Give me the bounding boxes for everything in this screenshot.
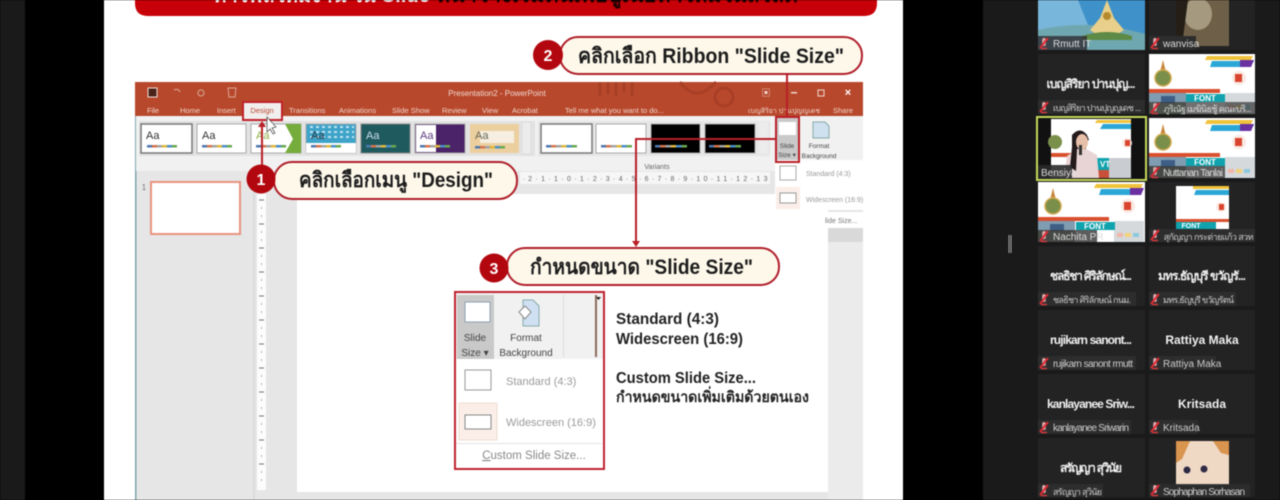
tile: เบญสิริยา: เบญสิริยา ปานปุญญเดช ... <box>1053 103 1141 114</box>
title banner <box>135 0 877 16</box>
tile: wanvisa <box>1149 0 1255 50</box>
Slide Size dropdown: Standard (4:3) <box>806 171 851 178</box>
tile: Rattiya Maka: Rattiya Maka <box>1165 333 1239 347</box>
tile: Rmutt IT <box>1038 0 1145 50</box>
tile: สุกัญญา: สุกัญญา กระต่ายแก้ว สวท <box>1164 232 1254 243</box>
person <box>1064 130 1099 178</box>
ribbon: Aa <box>420 130 434 142</box>
Slide Size dropdown: lide Size... <box>825 218 857 225</box>
tile: Kritsada: Kritsada <box>1178 397 1226 411</box>
tile: shared slide thumbnail 1 <box>1149 54 1255 115</box>
PowerPoint title bar: Review <box>442 106 467 115</box>
tile: Bensiya presenter: VT <box>1100 160 1110 169</box>
tile: มทร.ธัญบุรี: มทร.ธัญบุรี ขวัญรั... <box>1158 269 1246 284</box>
tile: Sophaphan Sorhasan with cat photo: Sophaphan Sorhasan <box>1163 487 1245 498</box>
text: custom size note: กำหนดขนาดเพิ่มเติมด้วยตนเอง <box>616 386 809 406</box>
tile: Nachita PR <box>1038 182 1145 243</box>
panel: PowerPoint window <box>135 82 863 500</box>
tile: เบญสิริยา: เบญสิริยา ปานปุญ... <box>1046 77 1136 92</box>
slide thumbnail <box>142 182 240 234</box>
PowerPoint title bar: Presentation2 - PowerPoint <box>448 89 546 98</box>
Slide Size highlight box <box>776 117 799 162</box>
PowerPoint title bar: ▣ <box>761 88 771 98</box>
PowerPoint title bar: Transitions <box>289 106 326 115</box>
ribbon: Variants <box>644 164 670 171</box>
tile: shared slide thumbnail 2: FONT <box>1194 158 1216 167</box>
tile: shared slide thumbnail 2 <box>1149 118 1255 179</box>
text: size options <box>616 311 743 348</box>
Design tab highlight <box>243 102 282 120</box>
tile: kanlayanee Sriwarin: kanlayanee Sriw... <box>1047 397 1135 411</box>
ribbon: Aa <box>311 130 325 142</box>
slide thumbnail: 1 <box>142 183 147 192</box>
icon: mouse cursor <box>267 117 276 134</box>
ribbon: Aa <box>202 130 216 142</box>
tile: เบญสิริยา <box>1038 54 1145 114</box>
callout: step 2 <box>533 37 862 74</box>
tile: rujikarn sanont <box>1038 310 1145 370</box>
PowerPoint title bar: Acrobat <box>512 106 539 115</box>
panel: enlarged Slide Size menu <box>455 292 604 469</box>
Slide Size dropdown <box>775 160 863 500</box>
tile: shared slide thumbnail 1: ภูริณัฐ เมฆินิธชู้ คณะบริ... <box>1164 104 1252 115</box>
tile: สรัญญา สุวินัย: สรัญญา สุวินัย <box>1053 487 1102 498</box>
panel: enlarged Slide Size menu: Format <box>510 333 542 344</box>
ribbon <box>136 116 863 171</box>
panel: enlarged Slide Size menu: Slide <box>464 333 487 344</box>
arrow: step 1 to Design tab <box>258 121 266 166</box>
PowerPoint title bar: Tell me what you want to do... <box>565 106 664 115</box>
tile: rujikarn sanont: rujikarn sanont... <box>1050 333 1132 347</box>
icon: format background <box>523 300 539 326</box>
horizontal ruler <box>520 172 770 184</box>
PowerPoint title bar: Slide Show <box>392 106 430 115</box>
tile: rujikarn sanont: rujikarn sanont rmutt <box>1053 359 1133 370</box>
tile: shared slide thumbnail 2: Nuttanan Tanlai <box>1163 168 1223 179</box>
PowerPoint title bar: Home <box>180 106 200 115</box>
Design tab highlight: Design <box>250 106 274 115</box>
tile: ชลธิชา: ชลธิชา ศิริลักษณ์... <box>1050 269 1132 283</box>
callout: step 2: 2 <box>544 48 553 65</box>
white slide canvas <box>297 194 828 492</box>
tile: kanlayanee Sriwarin: kanlayanee Sriwarin <box>1053 423 1129 434</box>
tile: shared slide thumbnail 1: FONT <box>1194 94 1216 103</box>
ribbon: Aa <box>366 130 380 142</box>
connector: step 2 to ribbon <box>786 74 788 117</box>
PowerPoint title bar: × <box>845 87 851 99</box>
ribbon: Format <box>809 143 829 150</box>
tile: ชลธิชา: ชลธิชา ศิริลักษณ์ กนม. <box>1053 294 1131 305</box>
tile: Nachita PR: Nachita PR <box>1053 232 1104 243</box>
tile: wanvisa: wanvisa <box>1162 39 1200 50</box>
text: custom size note: Custom Slide Size... <box>616 370 756 387</box>
tile: kanlayanee Sriwarin <box>1038 374 1145 434</box>
panel: enlarged Slide Size menu: Widescreen (16:9) <box>506 417 596 429</box>
tile: Rmutt IT: Rmutt IT <box>1053 39 1091 50</box>
vertical ruler <box>257 194 266 490</box>
panel: enlarged Slide Size menu: Custom Slide Size... <box>482 450 586 462</box>
tile: Nachita PR: FONT <box>1084 222 1106 231</box>
text: custom size note <box>616 370 809 406</box>
tile: Kritsada: Kritsada <box>1163 423 1200 434</box>
callout: step 3 <box>480 248 779 285</box>
ribbon: Aa <box>256 130 270 142</box>
tile: สรัญญา สุวินัย: สรัญญา สุวินัย <box>1060 461 1122 476</box>
PowerPoint title bar: Share <box>833 106 853 115</box>
PowerPoint title bar: File <box>147 106 159 115</box>
ribbon: Background <box>802 153 837 160</box>
ribbon: Slide <box>780 143 795 150</box>
panel: enlarged Slide Size menu: Background <box>499 348 553 359</box>
callout: step 2: คลิกเลือก Ribbon "Slide Size" <box>578 44 844 68</box>
icon: panel drag handle <box>1009 235 1011 253</box>
tile: ชลธิชา <box>1038 246 1145 306</box>
tile: สุกัญญา: FONT <box>1181 223 1201 230</box>
text: size options: Widescreen (16:9) <box>616 331 743 348</box>
horizontal ruler: ·2·1·1·0·1·2·3·4·5·6·7·8·9·10·11·12·13 <box>522 176 768 183</box>
tile: สุกัญญา <box>1149 182 1255 243</box>
PowerPoint title bar: เบญสิริยา ปานปุญญเดช <box>748 107 820 115</box>
ribbon: Aa <box>475 130 489 142</box>
PowerPoint title bar <box>135 82 863 116</box>
panel: presentation slide <box>104 0 903 500</box>
tile: Rattiya Maka: Rattiya Maka <box>1163 359 1222 370</box>
ribbon: Size ▾ <box>778 152 797 159</box>
tile: มทร.ธัญบุรี: มทร.ธัญบุรี ขวัญรัตน์ <box>1163 294 1234 306</box>
tile: Sophaphan Sorhasan with cat photo <box>1149 438 1255 498</box>
callout: step 3: กำหนดขนาด "Slide Size" <box>530 256 753 279</box>
panel: enlarged Slide Size menu: Size ▾ <box>461 348 489 359</box>
tile: Bensiya presenter: Bensiya <box>1041 168 1077 179</box>
callout: step 3: 3 <box>490 261 499 278</box>
tile: มทร.ธัญบุรี <box>1149 246 1255 306</box>
arrow: ribbon to step 3 <box>632 139 775 247</box>
panel: participants gallery <box>1037 0 1255 498</box>
text: size options: Standard (4:3) <box>616 311 719 328</box>
PowerPoint title bar: Insert <box>217 106 237 115</box>
tile: Bensiya presenter <box>1037 117 1146 180</box>
tile: Kritsada <box>1149 374 1255 434</box>
tile: สรัญญา สุวินัย <box>1038 438 1145 498</box>
PowerPoint title bar: Animations <box>339 106 376 115</box>
tile: Rattiya Maka <box>1149 310 1255 370</box>
PowerPoint title bar: View <box>482 106 499 115</box>
Slide Size dropdown: Widescreen (16:9) <box>806 197 863 204</box>
callout: step 1: 1 <box>257 172 266 189</box>
ribbon: Aa <box>146 130 160 142</box>
panel: enlarged Slide Size menu: Standard (4:3) <box>506 376 576 388</box>
callout: step 1 <box>246 162 517 199</box>
callout: step 1: คลิกเลือกเมนู "Design" <box>299 168 493 194</box>
